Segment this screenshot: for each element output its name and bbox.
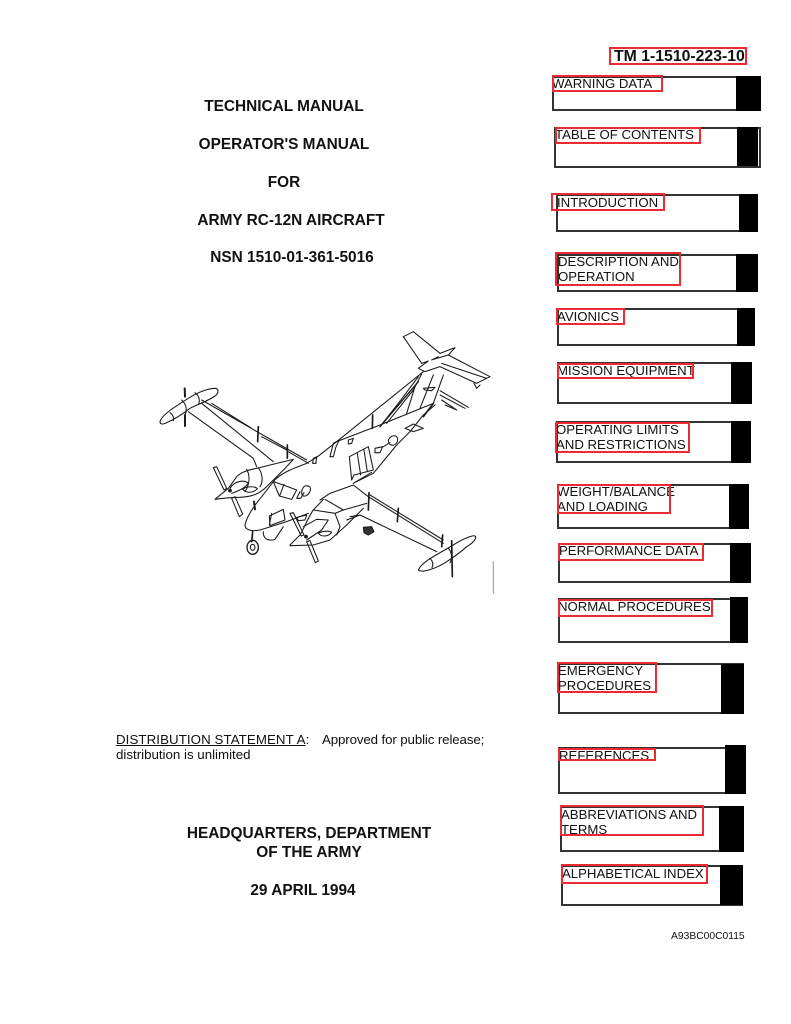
tab: emergency procedures: EMERGENCY [558,663,643,678]
tab: avionics: AVIONICS [557,309,619,324]
tab: normal procedures [558,597,748,643]
left wing [160,388,308,467]
left engine [213,459,293,517]
tab: operating limits and restrictions: OPERATING LIMITS [556,422,679,437]
tab: introduction [551,193,758,232]
tab: description and operation: DESCRIPTION AND [558,254,679,269]
distribution statement: DISTRIBUTION STATEMENT A: [116,732,309,747]
tab: references [558,745,746,794]
tab: operating limits and restrictions [555,421,751,463]
heading: headquarters: HEADQUARTERS, DEPARTMENT [187,825,431,842]
tab: weight/balance and loading: AND LOADING [557,499,648,514]
heading: operator's manual: OPERATOR'S MANUAL [199,136,369,153]
tab: abbreviations and terms: ABBREVIATIONS AND [561,807,697,822]
tab: table of contents [554,127,761,168]
heading: technical manual: TECHNICAL MANUAL [204,98,364,115]
document number: TM 1-1510-223-10 [614,48,745,65]
margin mark [492,562,495,593]
distribution statement [116,732,484,762]
tab: emergency procedures [557,662,744,714]
heading: NSN: NSN 1510-01-361-5016 [210,249,374,266]
tab: introduction: INTRODUCTION [557,195,658,210]
distribution statement: distribution is unlimited [116,747,251,762]
tab: table of contents: TABLE OF CONTENTS [555,127,694,142]
tab: mission equipment [557,362,752,404]
landing gear [247,532,258,554]
right engine [290,499,363,563]
tab: performance data: PERFORMANCE DATA [559,543,698,558]
distribution statement: Approved for public release; [322,732,484,747]
heading: of the army: OF THE ARMY [256,844,362,861]
tab: weight/balance and loading: WEIGHT/BALANCE [557,484,675,499]
tab: performance data [558,543,751,583]
tab: emergency procedures: PROCEDURES [558,678,651,693]
tail [403,332,490,417]
tab: description and operation [555,252,758,292]
tab: warning data: WARNING DATA [552,76,652,91]
tab: operating limits and restrictions: AND RESTRICTIONS [556,437,686,452]
tab: abbreviations and terms [560,805,744,852]
figure code: A93BC00C0115 [671,931,745,942]
fuselage [245,372,443,540]
tab: warning data [552,75,761,111]
tab: references: REFERENCES [559,748,649,763]
tab: alphabetical index: ALPHABETICAL INDEX [562,866,704,881]
tab: normal procedures: NORMAL PROCEDURES [558,599,711,614]
tab: abbreviations and terms: TERMS [561,822,607,837]
illustration: RC-12N aircraft [160,331,494,594]
tab: alphabetical index [561,864,743,906]
heading: aircraft: ARMY RC-12N AIRCRAFT [197,212,385,229]
tab: weight/balance and loading [557,484,749,529]
tab: description and operation: OPERATION [558,269,635,284]
right wing [320,485,476,577]
tab: avionics [556,308,755,346]
heading: for: FOR [268,174,300,191]
date: 29 APRIL 1994 [250,882,356,899]
tab: mission equipment: MISSION EQUIPMENT [557,363,695,378]
